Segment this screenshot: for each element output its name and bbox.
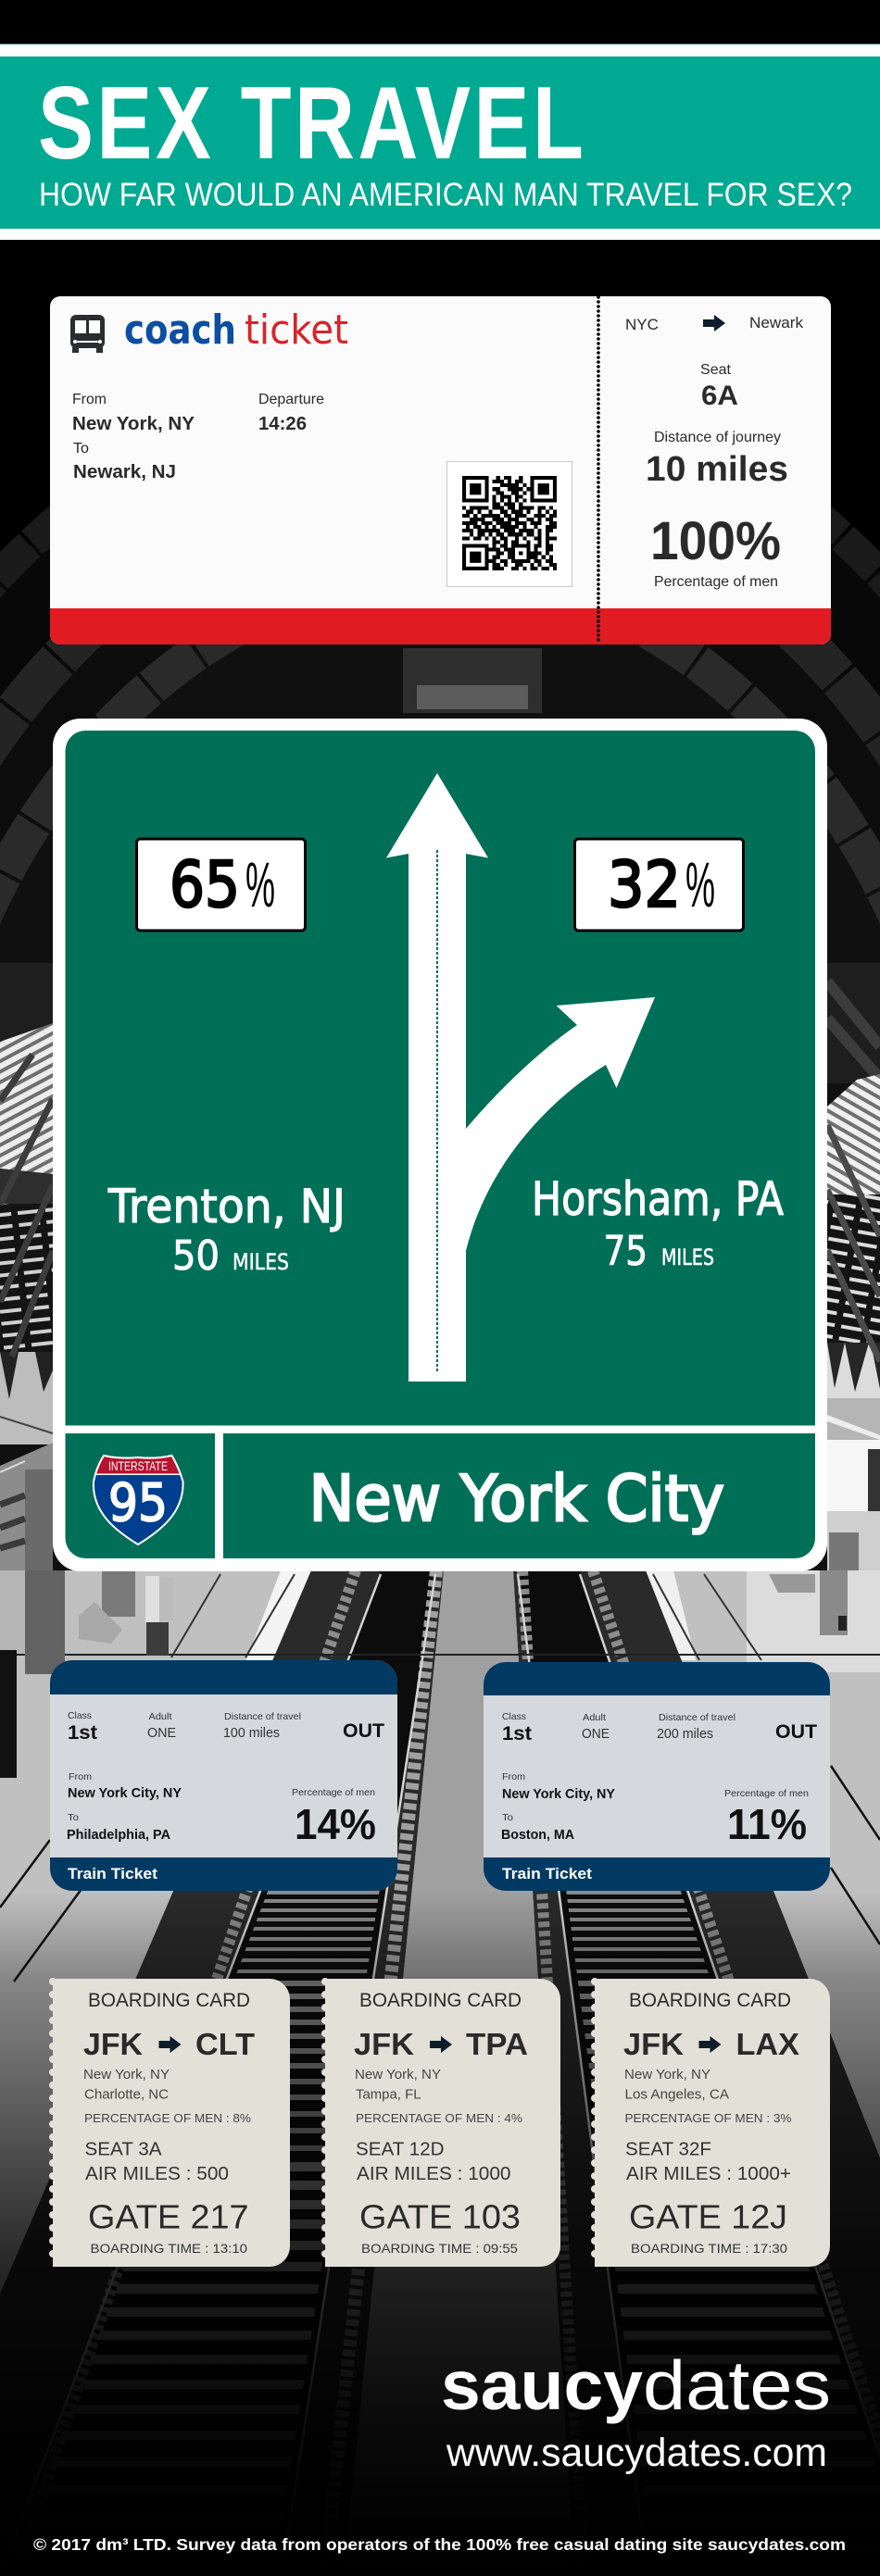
panel: train ticket Philadelphia: OUT [343,1720,384,1742]
panel: train ticket Boston: 1st [502,1723,532,1744]
panel: train ticket Boston: Boston, MA [501,1827,574,1843]
panel: boarding card Charlotte: Charlotte, NC [84,2087,169,2102]
icon: interstate 95 shield: INTERSTATE [108,1459,168,1473]
panel: train ticket Philadelphia [50,1660,397,1891]
panel: train ticket Boston: Distance of travel [659,1712,735,1723]
panel: train ticket Philadelphia: Adult [148,1711,172,1722]
panel: train ticket Boston: From [502,1771,525,1782]
destination: Horsham: MILES [661,1244,714,1270]
panel: train ticket Boston: Train Ticket [502,1866,593,1882]
panel: boarding card Los Angeles: SEAT 32F [625,2139,711,2159]
logo: saucydates: saucy [441,2346,643,2424]
ticket stub details: 6A [701,381,738,411]
percentage plate: 32%: 32 [608,848,681,922]
panel: boarding card Los Angeles: BOARDING CARD [629,1990,791,2011]
panel: boarding card Tampa: Tampa, FL [356,2087,421,2102]
ticket stub details: Distance of journey [654,430,781,445]
title: SEX TRAVEL [38,67,584,181]
destination: Trenton [107,1180,346,1280]
panel: boarding card Charlotte: New York, NY [83,2067,170,2082]
panel: boarding card Tampa: New York, NY [355,2067,441,2082]
panel: highway sign [53,719,827,1571]
icon: arrow [698,2036,721,2053]
ticket stub details: 100% [650,511,781,571]
background: train station photograph [0,506,880,2469]
panel: train ticket Philadelphia: 14% [295,1800,376,1848]
panel: boarding card Charlotte: GATE 217 [88,2198,248,2235]
panel: boarding card Los Angeles: AIR MILES : 1000+ [626,2164,791,2184]
destination: Horsham [532,1172,784,1275]
icon: bus [70,315,105,353]
journey details: New York, NY [72,414,195,434]
QR code [446,461,572,587]
panel: boarding card Tampa: AIR MILES : 1000 [357,2164,511,2184]
destination: Horsham: 75 [604,1228,647,1275]
percentage plate: 65%: % [245,849,275,920]
panel: train ticket Philadelphia: Train Ticket [68,1866,158,1882]
journey details: Departure [258,392,324,407]
panel: boarding card Charlotte: CLT [195,2027,255,2061]
panel: train ticket Boston: 11% [727,1800,807,1848]
panel: train ticket Philadelphia: 1st [68,1722,97,1744]
panel: boarding card Los Angeles: New York, NY [624,2067,710,2082]
panel: train ticket Philadelphia: Percentage of men [292,1787,375,1798]
destination: Horsham: Horsham, PA [532,1172,784,1226]
panel: boarding card Tampa: GATE 103 [359,2198,521,2235]
panel: coach ticket [50,296,831,644]
panel: boarding card Charlotte: SEAT 3A [85,2139,162,2159]
ticket stub details: 10 miles [646,450,788,489]
website url: www.saucydates.com [446,2431,827,2475]
icon: interstate 95 shield: 95 [108,1473,168,1533]
panel: boarding card Tampa [325,1979,560,2267]
header banner [0,44,880,240]
panel: train ticket Philadelphia: From [69,1771,92,1782]
panel: boarding card Tampa: PERCENTAGE OF MEN : 4% [356,2112,522,2125]
panel: boarding card Charlotte: PERCENTAGE OF MEN : 8% [84,2112,251,2125]
ticket stub details: Newark [749,314,804,331]
panel: train ticket Boston: ONE [582,1727,610,1742]
panel: train ticket Philadelphia: Distance of travel [224,1711,301,1722]
destination: Trenton: Trenton, NJ [107,1180,346,1233]
percentage plate: 65%: 65 [170,848,240,922]
panel: boarding card Los Angeles: BOARDING TIME : 17:30 [631,2241,787,2256]
destination: Trenton: 50 [172,1232,220,1280]
panel: boarding card Tampa: BOARDING CARD [359,1990,522,2011]
journey details [72,392,324,482]
panel: train ticket Boston: New York City, NY [502,1786,615,1802]
panel: train ticket Boston: Percentage of men [724,1788,809,1799]
panel: boarding card Tampa: JFK [354,2027,414,2061]
panel: boarding card Charlotte: JFK [83,2027,143,2061]
panel: boarding card Los Angeles: LAX [735,2027,799,2061]
panel: boarding card Charlotte: AIR MILES : 500 [85,2164,229,2184]
logo: coach ticket: ticket [245,306,348,354]
ticket stub details: NYC [625,316,659,333]
journey details: 14:26 [258,414,307,434]
panel: boarding card Los Angeles [595,1979,830,2267]
panel: boarding card Los Angeles: Los Angeles, CA [624,2087,729,2102]
icon: interstate 95 shield [94,1456,183,1544]
panel: boarding card Charlotte: BOARDING TIME : 13:10 [91,2241,247,2256]
ticket stub details: Percentage of men [654,574,778,590]
panel: train ticket Boston [484,1662,830,1891]
panel: train ticket Philadelphia: Class [68,1710,92,1721]
panel: boarding card Charlotte: BOARDING CARD [88,1990,250,2011]
destination: Trenton: MILES [233,1249,289,1275]
panel: boarding card Tampa: BOARDING TIME : 09:55 [361,2241,518,2256]
panel: train ticket Philadelphia: Philadelphia, PA [67,1827,170,1843]
arrow: split road [386,773,655,1382]
icon: arrow [703,315,725,331]
logo: saucydates: dates [643,2346,831,2424]
journey details: To [73,441,89,456]
panel: boarding card Tampa: SEAT 12D [356,2139,445,2159]
panel: train ticket Boston: 200 miles [657,1727,713,1742]
panel: train ticket Boston: To [502,1812,513,1823]
panel: train ticket Philadelphia: To [68,1812,79,1823]
journey details: Newark, NJ [73,462,176,482]
percentage plate: 32%: % [685,849,715,920]
logo: saucydates [441,2346,831,2424]
percentage plate: 32% [574,839,743,931]
footer credit: © 2017 dm³ LTD. Survey data from operators of the 100% free casual dating site saucydates.com [33,2535,846,2554]
panel: train ticket Philadelphia: New York City, NY [68,1785,182,1801]
percentage plate: 65% [137,839,306,931]
panel: train ticket Philadelphia: 100 miles [223,1726,280,1741]
ticket stub details: Seat [700,362,732,378]
logo: coach ticket: coach [124,306,236,354]
sign text: New York City: New York City [309,1462,724,1536]
panel: boarding card Tampa: TPA [466,2027,528,2061]
panel: boarding card Los Angeles: GATE 12J [629,2198,787,2235]
ticket stub details [625,314,804,590]
journey details: From [72,392,107,407]
panel: boarding card Los Angeles: JFK [623,2027,684,2061]
panel: boarding card Los Angeles: PERCENTAGE OF MEN : 3% [624,2112,791,2125]
panel: train ticket Boston: Adult [583,1712,606,1723]
logo: coach ticket [124,306,348,354]
icon: arrow [430,2036,452,2053]
panel: train ticket Boston: Class [502,1711,526,1722]
panel: train ticket Boston: OUT [775,1721,817,1743]
icon: arrow [159,2036,182,2053]
panel: train ticket Philadelphia: ONE [147,1726,176,1741]
panel: boarding card Charlotte [53,1979,290,2267]
